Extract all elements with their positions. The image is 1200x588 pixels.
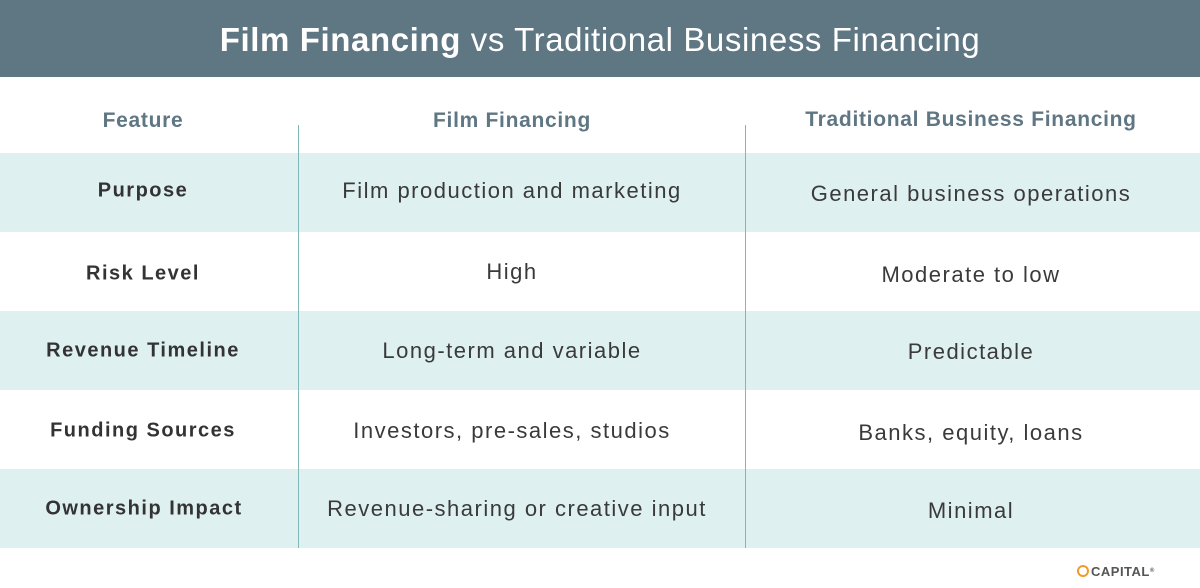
logo: CAPITAL	[1091, 564, 1150, 578]
row band: ownership	[0, 469, 1200, 548]
header: feature: Feature	[103, 109, 183, 132]
row: revenue: Revenue Timeline	[46, 340, 240, 362]
row: purpose: Purpose	[98, 180, 188, 202]
header: film financing: Film Financing	[433, 109, 591, 132]
cell: General business operations	[811, 181, 1131, 206]
cell: Minimal	[928, 498, 1014, 523]
column divider 2	[745, 125, 746, 548]
header: traditional: Traditional Business Financing	[805, 108, 1137, 131]
row band: revenue	[0, 311, 1200, 390]
title: Film Financing vs Traditional Business Financing	[220, 21, 980, 58]
title bar	[0, 0, 1200, 77]
cell: Revenue-sharing or creative input	[327, 496, 707, 521]
cell: Predictable	[908, 339, 1034, 364]
row band: purpose	[0, 153, 1200, 232]
row: ownership: Ownership Impact	[45, 498, 243, 520]
row: risk: Risk Level	[86, 262, 200, 284]
cell: Investors, pre-sales, studios	[353, 418, 671, 443]
column divider 1	[298, 125, 299, 548]
cell: High	[486, 259, 538, 284]
cell: Film production and marketing	[342, 178, 682, 203]
logo: ®	[1150, 568, 1155, 574]
row: funding: Funding Sources	[50, 420, 236, 442]
cell: Moderate to low	[881, 262, 1061, 287]
cell: Long-term and variable	[382, 338, 642, 363]
cell: Banks, equity, loans	[858, 420, 1084, 445]
